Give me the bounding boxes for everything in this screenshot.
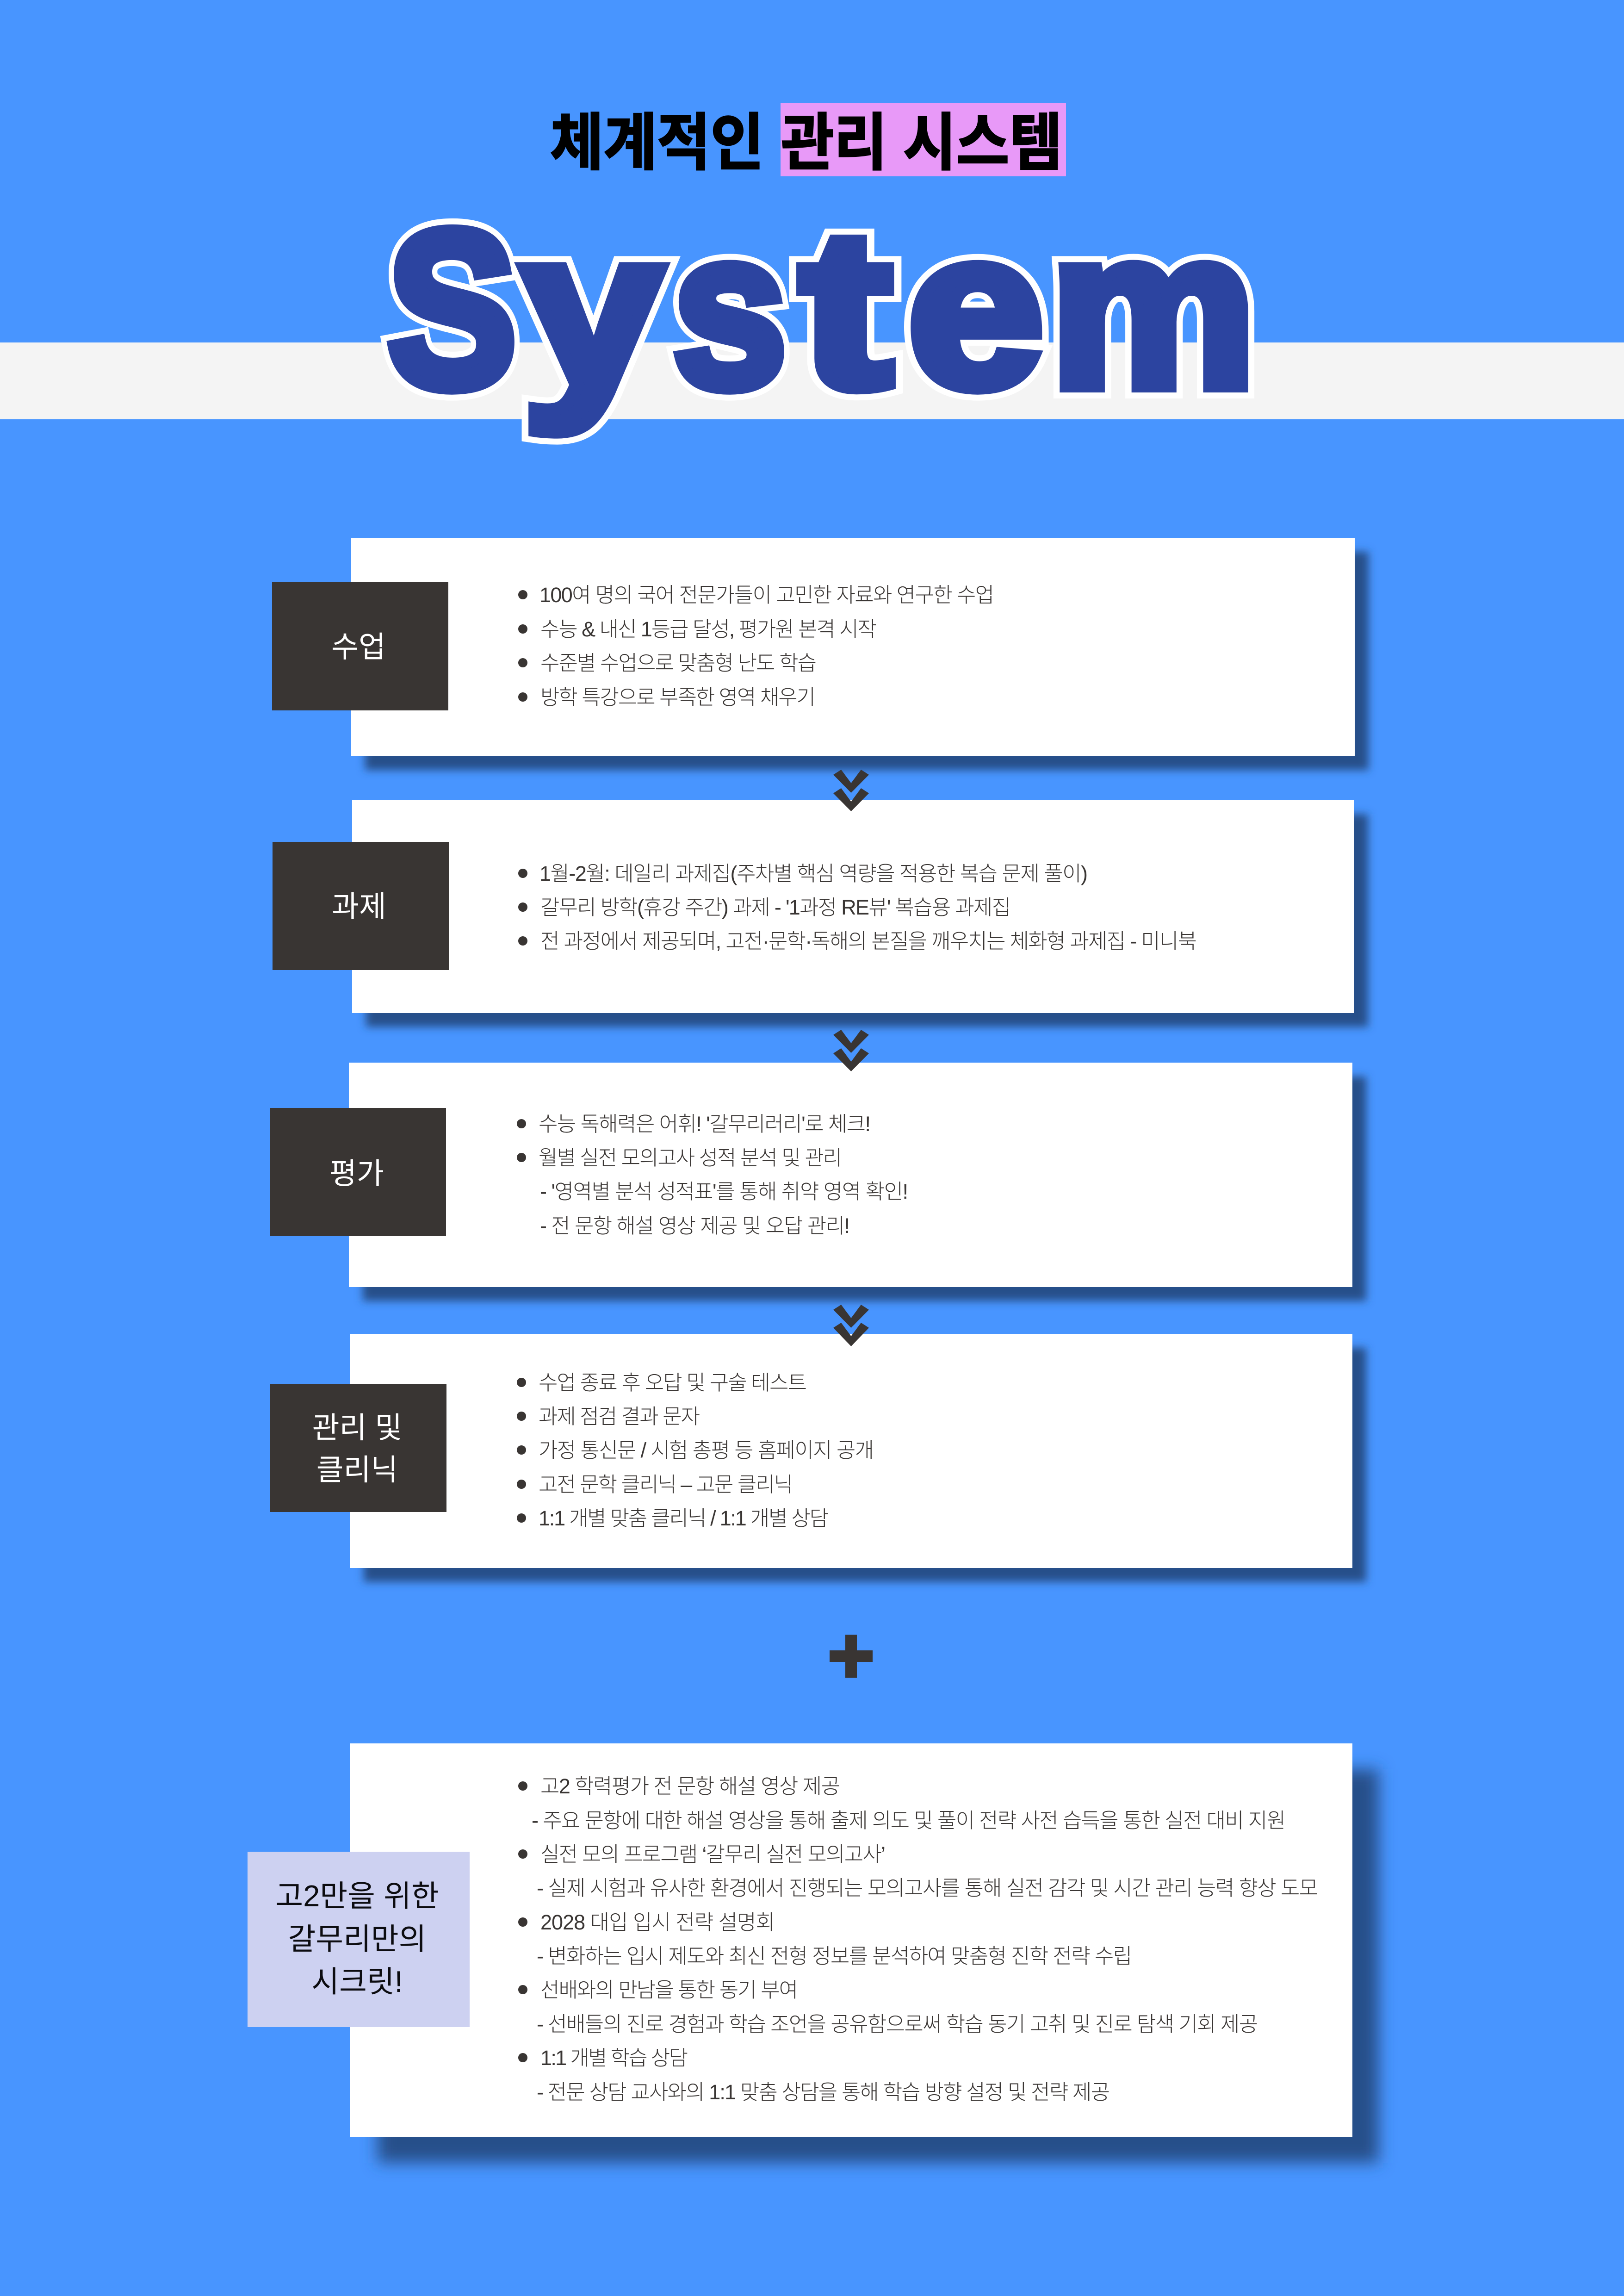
panel: 과제 (273, 800, 1368, 1027)
list: 관리 및 클리닉 items (517, 1371, 874, 1530)
list: 고2 items: 고2 학력평가 전 문항 해설 영상 제공 (540, 1774, 840, 1798)
label: 평가 (270, 1108, 446, 1236)
hero word: System: m (1050, 185, 1256, 433)
list: 과제 items: 갈무리 방학(휴강 주간) 과제 - '1과정 RE뷰' 복습용 과제집 (540, 896, 1011, 919)
list: 고2 items: - 선배들의 진로 경험과 학습 조언을 공유함으로써 학습 동기 고취 및 진로 탐색 기회 제공 (537, 2012, 1258, 2036)
list: 고2 items: - 주요 문항에 대한 해설 영상을 통해 출제 의도 및 풀이 전략 사전 습득을 통한 실전 대비 지원 (532, 1809, 1286, 1832)
list: 고2 items: - 변화하는 입시 제도와 최신 전형 정보를 분석하여 맞춤형 진학 전략 수립 (537, 1944, 1132, 1968)
list: 고2 items: 실전 모의 프로그램 ‘갈무리 실전 모의고사’ (540, 1842, 886, 1866)
list: 평가 items: - 전 문항 해설 영상 제공 및 오답 관리! (540, 1214, 850, 1238)
list: 수업 items: 방학 특강으로 부족한 영역 채우기 (540, 685, 816, 709)
label: 관리 및 클리닉: 클리닉 (316, 1453, 398, 1487)
panel: 관리 및 클리닉 (270, 1334, 1366, 1582)
list: 관리 및 클리닉 items: 1:1 개별 맞춤 클리닉 / 1:1 개별 상담 (539, 1506, 829, 1530)
hero word: System: y (523, 185, 663, 435)
hero word: System: e (908, 185, 1043, 433)
arrow: 과제 to 평가 (833, 1030, 869, 1071)
label: 고2만을 위한 갈무리만의 시크릿!: 시크릿! (311, 1965, 403, 1998)
label: 수업 (272, 582, 448, 710)
list: 관리 및 클리닉 items: 과제 점검 결과 문자 (539, 1405, 700, 1428)
label: 과제: 과제 (332, 890, 386, 923)
panel: 수업 (272, 538, 1369, 770)
title text highlighted part: 관리 시스템 (781, 109, 1062, 178)
hero word: System: t (801, 185, 891, 433)
list: 관리 및 클리닉 items: 고전 문학 클리닉 – 고문 클리닉 (539, 1473, 793, 1496)
list: 과제 items (518, 862, 1197, 953)
label: 관리 및 클리닉 (270, 1384, 446, 1512)
list: 고2 items: 2028 대입 입시 전략 설명회 (540, 1910, 775, 1934)
list: 관리 및 클리닉 items: 가정 통신문 / 시험 총평 등 홈페이지 공개 (539, 1438, 874, 1462)
label: 관리 및 클리닉: 관리 및 (312, 1411, 402, 1444)
list: 고2 items: 1:1 개별 학습 상담 (540, 2046, 688, 2070)
title text dark part: 체계적인 (550, 109, 764, 178)
hero word: System: y (523, 185, 663, 435)
list: 고2 items: - 실제 시험과 유사한 환경에서 진행되는 모의고사를 통해 실전 감각 및 시간 관리 능력 향상 도모 (537, 1876, 1318, 1900)
white band behind the word System (0, 342, 1624, 419)
label: 고2만을 위한 갈무리만의 시크릿!: 고2만을 위한 (275, 1879, 439, 1913)
label: 평가: 평가 (329, 1157, 384, 1190)
list: 평가 items: 월별 실전 모의고사 성적 분석 및 관리 (539, 1146, 842, 1170)
list: 수업 items: 수준별 수업으로 맞춤형 난도 학습 (540, 651, 817, 675)
hero word: System: e (908, 185, 1043, 433)
list: 수업 items (518, 583, 994, 709)
panel: 평가 (270, 1063, 1366, 1301)
arrow: 수업 to 과제 (833, 770, 869, 811)
hero word: System: m (1050, 185, 1256, 433)
list: 고2 items (518, 1774, 1318, 2104)
list: 수업 items: 수능 & 내신 1등급 달성, 평가원 본격 시작 (540, 617, 877, 641)
label: 고2만을 위한 갈무리만의 시크릿!: 갈무리만의 (288, 1922, 427, 1956)
hero word: System: t (801, 185, 891, 433)
hero word: System (388, 185, 1256, 435)
title: 체계적인 관리 시스템 (550, 103, 1066, 178)
hero word: System: s (673, 185, 787, 433)
list: 고2 items: 선배와의 만남을 통한 동기 부여 (540, 1978, 798, 2002)
label: 과제 (273, 842, 449, 970)
list: 평가 items: - '영역별 분석 성적표'를 통해 취약 영역 확인! (540, 1180, 908, 1203)
title highlight box (781, 103, 1066, 176)
panel: 고2만을 위한 갈무리만의 시크릿 (248, 1743, 1379, 2163)
list: 수업 items: 100여 명의 국어 전문가들이 고민한 자료와 연구한 수업 (539, 583, 994, 607)
arrow: 평가 to 관리 및 클리닉 (833, 1305, 869, 1346)
hero word: System: S (388, 185, 516, 433)
label: 수업: 수업 (331, 630, 386, 664)
list: 평가 items: 수능 독해력은 어휘! '갈무리러리'로 체크! (539, 1112, 871, 1136)
list: 과제 items: 1월-2월: 데일리 과제집(주차별 핵심 역량을 적용한 복습 문제 풀이) (539, 862, 1088, 885)
icon: plus sign (830, 1635, 873, 1678)
hero word: System: S (388, 185, 516, 433)
hero word: System: s (673, 185, 787, 433)
list: 과제 items: 전 과정에서 제공되며, 고전·문학·독해의 본질을 깨우치는 체화형 과제집 - 미니북 (540, 929, 1197, 953)
list: 관리 및 클리닉 items: 수업 종료 후 오답 및 구술 테스트 (539, 1371, 807, 1394)
list: 평가 items (517, 1112, 908, 1238)
list: 고2 items: - 전문 상담 교사와의 1:1 맞춤 상담을 통해 학습 방향 설정 및 전략 제공 (537, 2080, 1110, 2104)
label: 고2만을 위한 갈무리만의 시크릿! (248, 1852, 470, 2027)
